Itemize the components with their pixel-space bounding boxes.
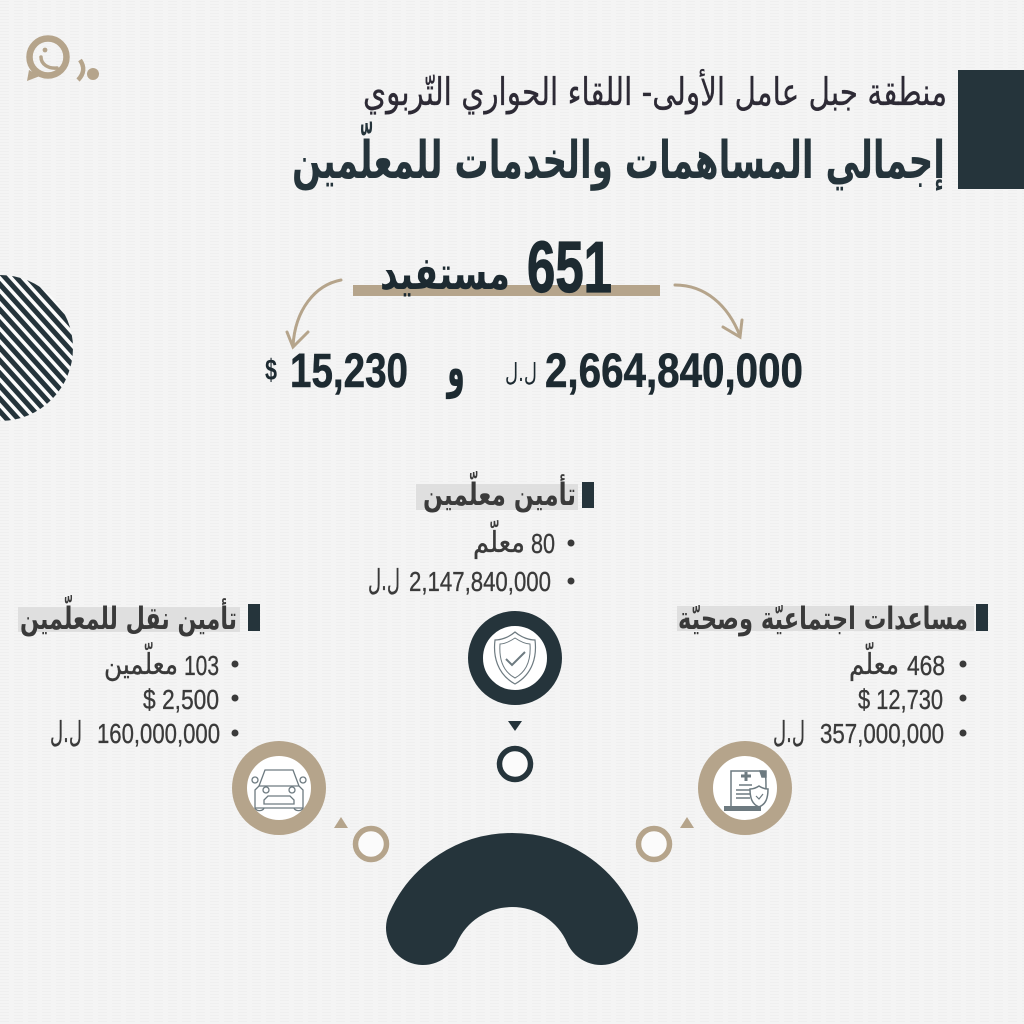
- amounts: [265, 336, 803, 399]
- beneficiaries total: [380, 228, 612, 308]
- list: $ 12,730: [858, 684, 943, 715]
- list: ل.ل: [50, 715, 82, 749]
- section heading: تأمين معلّمين: [423, 470, 576, 513]
- list: ل.ل: [368, 563, 400, 597]
- connector triangle: left: [334, 817, 348, 828]
- section heading: تأمين نقل للمعلّمين: [20, 594, 237, 637]
- list: 103: [184, 650, 219, 681]
- connector circle: center: [500, 748, 530, 780]
- amounts: 2,664,840,000: [545, 345, 803, 398]
- section: social and health aid: [677, 601, 988, 749]
- logo: [27, 38, 99, 81]
- connector triangle: center: [508, 721, 522, 731]
- list: معلّم: [849, 643, 899, 682]
- section: transport: [18, 594, 260, 749]
- connector circle: left: [356, 828, 386, 860]
- list: 80: [531, 528, 555, 559]
- arrow: right: [675, 285, 742, 337]
- beneficiaries total: مستفيد: [380, 246, 510, 300]
- beneficiaries total: 651: [527, 228, 612, 308]
- section heading: [18, 594, 260, 637]
- connector triangle: right: [680, 817, 694, 828]
- list: $ 2,500: [143, 684, 219, 715]
- list: [368, 521, 574, 597]
- amounts: $: [265, 354, 277, 387]
- list: معلّمين: [104, 643, 178, 681]
- icon: medical document in tan ring: [706, 748, 784, 828]
- list: [50, 643, 238, 749]
- section heading: [416, 470, 594, 513]
- arrow: left: [287, 280, 341, 347]
- list: 468: [907, 650, 945, 681]
- list: [773, 643, 966, 749]
- list: 160,000,000: [97, 718, 220, 749]
- list: 2,147,840,000: [409, 566, 551, 597]
- header block: [958, 70, 1024, 189]
- amounts: 15,230: [290, 345, 408, 398]
- amounts: و: [445, 336, 465, 399]
- icon: car in tan ring: [240, 748, 318, 828]
- striped circle: [0, 275, 73, 421]
- section: teacher insurance: [368, 470, 594, 597]
- arch: [423, 870, 601, 928]
- beneficiaries underline: [353, 285, 660, 296]
- list: ل.ل: [773, 715, 805, 749]
- list: 357,000,000: [820, 718, 944, 749]
- list: معلّم: [473, 521, 525, 560]
- connector circle: right: [638, 828, 670, 860]
- icon: shield in dark ring: [476, 618, 554, 698]
- amounts: ل.ل: [505, 358, 537, 387]
